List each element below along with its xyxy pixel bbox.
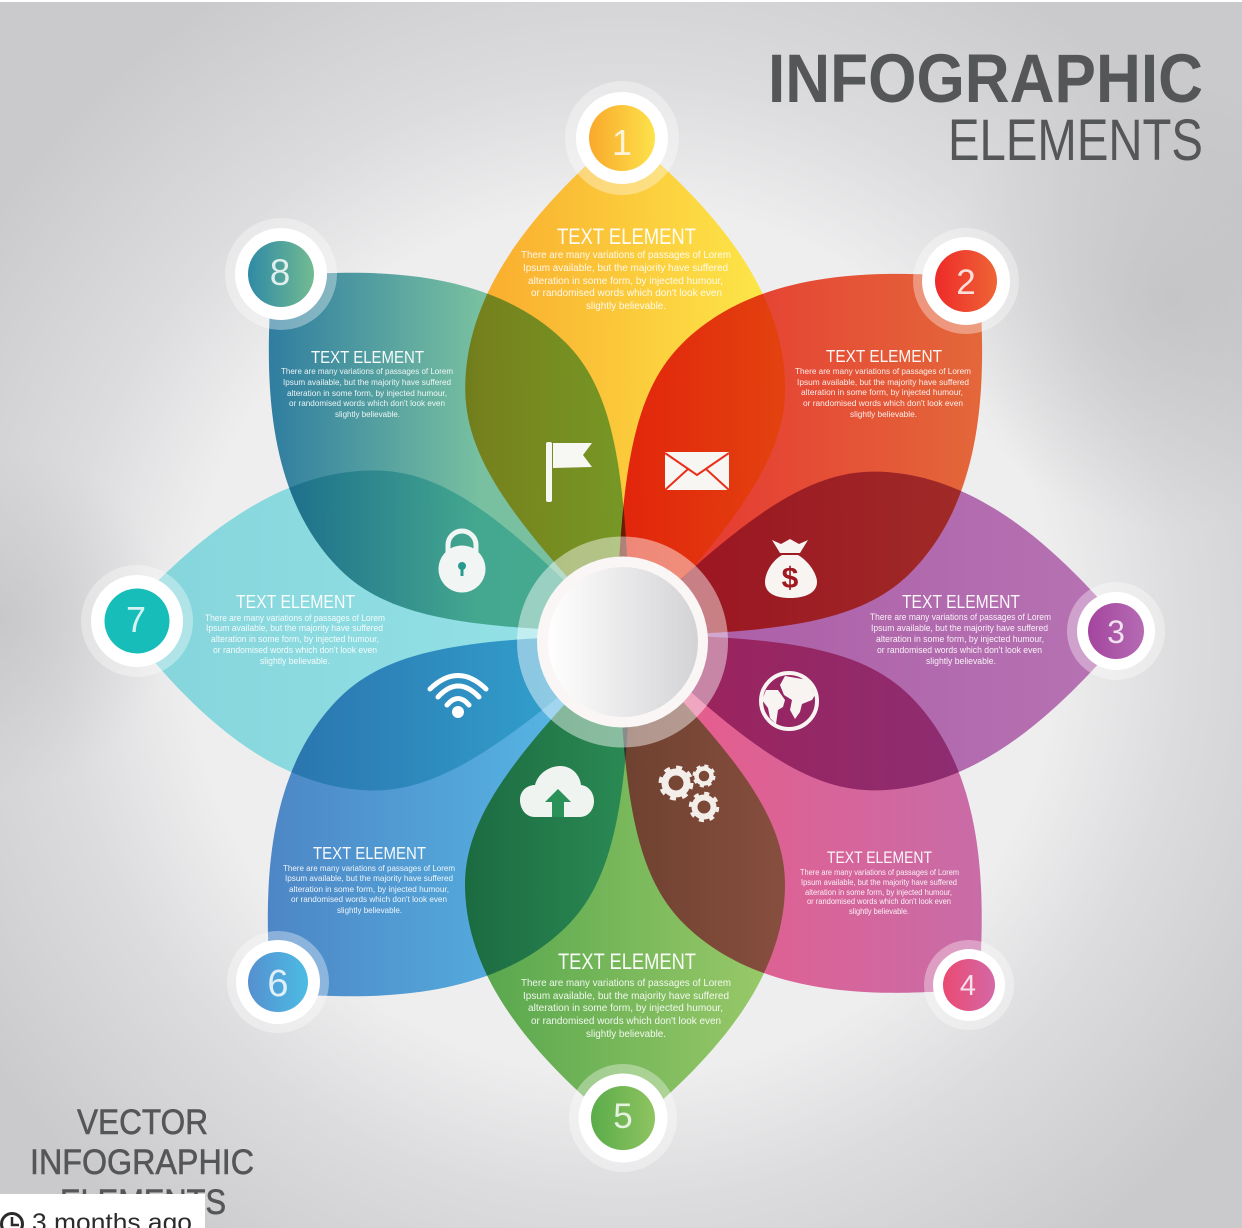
text block 5: Ipsum available, but the majority have suffered bbox=[523, 990, 729, 1002]
text block 8: TEXT ELEMENT bbox=[311, 347, 424, 367]
text block 3: or randomised words which don't look even bbox=[877, 645, 1042, 655]
text block 7: slightly believable. bbox=[260, 656, 330, 666]
text block 2: TEXT ELEMENT bbox=[826, 346, 942, 366]
text block 6: slightly believable. bbox=[337, 905, 402, 915]
badge 5 bbox=[569, 1064, 677, 1172]
text block 6 bbox=[283, 843, 455, 915]
badge 2 bbox=[913, 228, 1019, 334]
badge 2: 2 bbox=[956, 263, 976, 302]
text block 4: There are many variations of passages of Lorem bbox=[800, 868, 959, 877]
badge 8 bbox=[225, 218, 337, 330]
text block 1: There are many variations of passages of Lorem bbox=[521, 249, 731, 261]
petal 5 green bbox=[465, 641, 785, 1133]
petal 3 purple bbox=[625, 472, 1128, 790]
text block 2: slightly believable. bbox=[850, 409, 917, 419]
petal 2 red bbox=[502, 162, 1093, 751]
text block 7: or randomised words which don't look even bbox=[213, 645, 377, 655]
petal 6 blue bbox=[157, 520, 745, 1107]
text block 5: There are many variations of passages of Lorem bbox=[521, 977, 731, 989]
caption: vector infographic elements: VECTOR bbox=[77, 1103, 208, 1142]
text block 8: alteration in some form, by injected humour, bbox=[287, 388, 447, 398]
timestamp label bbox=[0, 1194, 205, 1228]
text block 1: or randomised words which don't look even bbox=[531, 287, 722, 299]
badge 4: 4 bbox=[960, 970, 976, 1002]
text block 5: alteration in some form, by injected humour, bbox=[528, 1002, 723, 1014]
petal 4 pink bbox=[506, 520, 1092, 1103]
petal 1 yellow bbox=[463, 130, 787, 642]
badge 4 bbox=[924, 940, 1014, 1030]
text block 3 bbox=[870, 591, 1051, 666]
badge 5: 5 bbox=[613, 1097, 633, 1136]
text block 6: There are many variations of passages of Lorem bbox=[283, 863, 455, 873]
text block 2: Ipsum available, but the majority have suffered bbox=[797, 377, 969, 387]
badge 6 bbox=[227, 931, 329, 1033]
title: INFOGRAPHIC bbox=[768, 40, 1203, 117]
text block 2 bbox=[795, 346, 971, 419]
text block 4: alteration in some form, by injected humour, bbox=[805, 888, 952, 897]
text block 7: Ipsum available, but the majority have suffered bbox=[206, 623, 383, 633]
badge 7 bbox=[81, 565, 193, 677]
text block 6: alteration in some form, by injected humour, bbox=[289, 884, 449, 894]
icon: globe bbox=[761, 673, 817, 729]
text block 8: There are many variations of passages of Lorem bbox=[281, 366, 453, 376]
badge 3 bbox=[1067, 582, 1165, 680]
caption: vector infographic elements bbox=[30, 1103, 254, 1222]
icon: money bag bbox=[765, 539, 817, 598]
text block 8: slightly believable. bbox=[335, 409, 400, 419]
flower petals bbox=[113, 130, 1128, 1133]
text block 3: Ipsum available, but the majority have suffered bbox=[871, 623, 1048, 633]
badge 8: 8 bbox=[270, 252, 290, 293]
text block 3: slightly believable. bbox=[926, 656, 996, 666]
text block 7: TEXT ELEMENT bbox=[236, 591, 355, 612]
text block 2: alteration in some form, by injected humour, bbox=[801, 387, 963, 397]
badge 1: 1 bbox=[612, 122, 632, 163]
text block 1 bbox=[521, 224, 731, 312]
petal 8 teal bbox=[159, 163, 743, 746]
badge 1 bbox=[565, 81, 679, 195]
title bbox=[768, 40, 1203, 173]
text block 3: TEXT ELEMENT bbox=[902, 591, 1020, 612]
icon: money bag: $ bbox=[782, 562, 799, 595]
icon: wifi bbox=[430, 676, 486, 718]
text block 1: TEXT ELEMENT bbox=[557, 224, 696, 249]
text block 4: TEXT ELEMENT bbox=[827, 849, 932, 867]
text block 4: slightly believable. bbox=[849, 907, 909, 916]
text block 1: Ipsum available, but the majority have suffered bbox=[523, 262, 728, 274]
petal 7 cyan bbox=[113, 460, 631, 801]
text block 5: slightly believable. bbox=[586, 1028, 666, 1040]
text block 6: TEXT ELEMENT bbox=[313, 843, 426, 863]
text block 7 bbox=[205, 591, 385, 666]
center hub bbox=[517, 536, 728, 748]
icon: cloud upload bbox=[520, 766, 594, 817]
icon: gears bbox=[660, 766, 718, 820]
text block 1: slightly believable. bbox=[586, 300, 666, 312]
badge 3: 3 bbox=[1107, 614, 1125, 650]
text block 5 bbox=[521, 949, 731, 1040]
text block 5: or randomised words which don't look even bbox=[531, 1015, 721, 1027]
text block 8: Ipsum available, but the majority have suffered bbox=[283, 377, 451, 387]
caption: vector infographic elements: INFOGRAPHIC bbox=[30, 1143, 254, 1182]
text block 1: alteration in some form, by injected humour, bbox=[528, 275, 723, 287]
text block 8 bbox=[281, 347, 453, 419]
icon: flag bbox=[546, 442, 592, 502]
text block 3: alteration in some form, by injected humour, bbox=[876, 634, 1044, 644]
badge 7: 7 bbox=[126, 599, 146, 640]
text block 4 bbox=[800, 849, 959, 916]
text block 3: There are many variations of passages of Lorem bbox=[870, 612, 1051, 622]
text block 4: or randomised words which don't look even bbox=[807, 897, 951, 906]
badge 6: 6 bbox=[267, 963, 289, 1005]
text block 5: TEXT ELEMENT bbox=[558, 949, 696, 974]
text block 6: or randomised words which don't look even bbox=[291, 894, 447, 904]
text block 2: or randomised words which don't look even bbox=[803, 398, 963, 408]
icon: padlock bbox=[438, 531, 486, 592]
text block 4: Ipsum available, but the majority have suffered bbox=[801, 878, 957, 887]
text block 6: Ipsum available, but the majority have suffered bbox=[285, 873, 453, 883]
text block 7: alteration in some form, by injected humour, bbox=[211, 634, 379, 644]
text block 8: or randomised words which don't look even bbox=[289, 398, 445, 408]
text block 7: There are many variations of passages of Lorem bbox=[205, 613, 385, 623]
icon: envelope bbox=[665, 452, 729, 490]
caption: vector infographic elements: ELEMENTS bbox=[60, 1183, 226, 1222]
text block 2: There are many variations of passages of Lorem bbox=[795, 366, 971, 376]
